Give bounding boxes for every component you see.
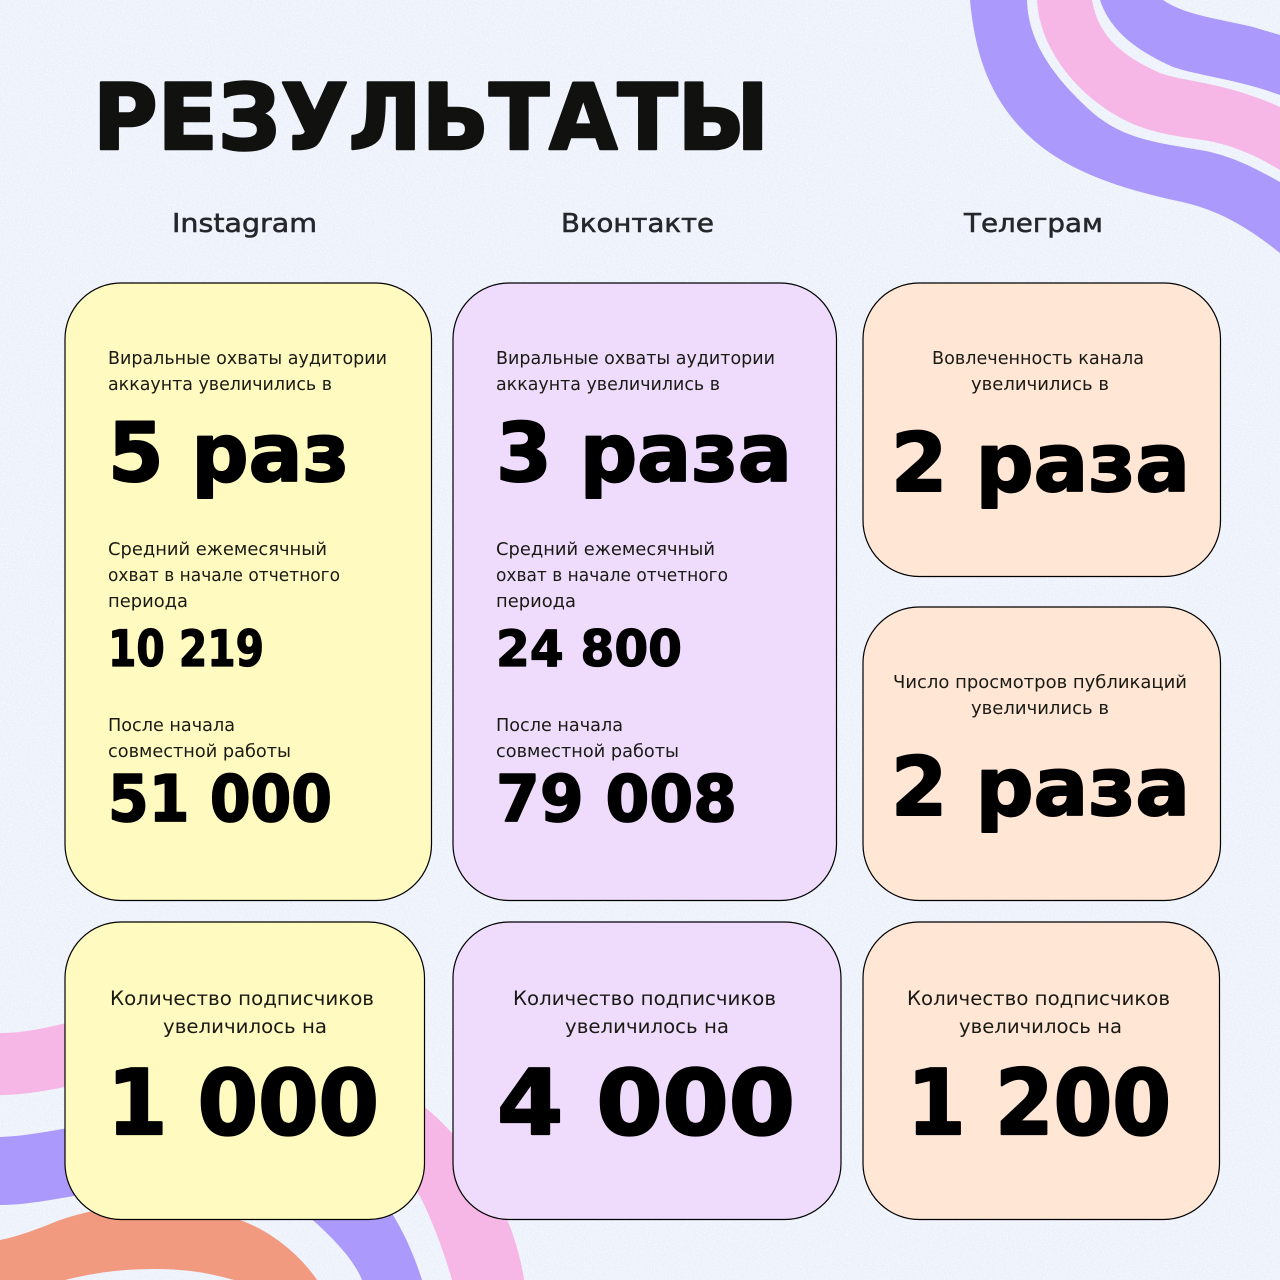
number: 2 раза: 2 раза — [891, 417, 1190, 511]
text: views: Число просмотров публикаций — [893, 673, 1187, 693]
number: 1 000: 1 000 — [107, 1051, 379, 1156]
text: engagement — [932, 349, 1144, 395]
panel: Telegram subscribers — [863, 922, 1220, 1220]
text: viral reach: аккаунта увеличились в — [108, 375, 332, 395]
text: monthly reach at start: охват в начале отчетного — [496, 566, 728, 586]
text: monthly reach at start: периода — [496, 592, 576, 612]
text: subscribers: Количество подписчиков — [513, 987, 776, 1010]
text: subscribers — [110, 987, 374, 1038]
text: monthly reach at start: Средний ежемесячный — [496, 540, 715, 560]
decorative waves: bottom left — [0, 1020, 524, 1280]
text: viral reach — [496, 349, 775, 395]
text: monthly reach at start: охват в начале отчетного — [108, 566, 340, 586]
column heading: Вконтакте: Вконтакте — [561, 209, 714, 239]
text: after start of work: совместной работы — [496, 742, 679, 762]
text: views — [893, 673, 1187, 719]
text: subscribers: увеличилось на — [959, 1015, 1122, 1038]
text: engagement: Вовлеченность канала — [932, 349, 1144, 369]
text: views: увеличились в — [971, 699, 1109, 719]
number: 3 раза: 3 раза — [496, 407, 792, 501]
text: after start of work: После начала — [108, 716, 235, 736]
number: 51 000: 51 000 — [108, 763, 332, 837]
text: viral reach: Виральные охваты аудитории — [108, 349, 387, 369]
text: engagement: увеличились в — [971, 375, 1109, 395]
text: subscribers — [513, 987, 776, 1038]
column heading: Instagram: Instagram — [172, 209, 317, 239]
panel: Telegram views — [863, 607, 1220, 900]
number: 10 219: 10 219 — [108, 620, 264, 678]
text: monthly reach at start: Средний ежемесячный — [108, 540, 327, 560]
text: after start of work: После начала — [496, 716, 623, 736]
panel: Telegram engagement — [863, 283, 1220, 576]
title: РЕЗУЛЬТАТЫ — [93, 66, 769, 171]
text: monthly reach at start — [496, 540, 728, 612]
text: viral reach: Виральные охваты аудитории — [496, 349, 775, 369]
panel: Vkontakte subscribers — [453, 922, 841, 1220]
number: 5 раз: 5 раз — [108, 407, 349, 501]
text: monthly reach at start: периода — [108, 592, 188, 612]
number: 4 000: 4 000 — [497, 1051, 795, 1156]
text: subscribers: Количество подписчиков — [110, 987, 374, 1010]
number: 1 200: 1 200 — [907, 1051, 1171, 1156]
text: after start of work — [108, 716, 291, 762]
decorative waves: top right — [970, 0, 1280, 253]
text: subscribers: увеличилось на — [565, 1015, 729, 1038]
text: after start of work — [496, 716, 679, 762]
text: viral reach — [108, 349, 387, 395]
text: viral reach: аккаунта увеличились в — [496, 375, 720, 395]
number: 2 раза: 2 раза — [891, 741, 1190, 835]
text: after start of work: совместной работы — [108, 742, 291, 762]
number: 24 800: 24 800 — [496, 620, 682, 678]
panel: Instagram subscribers — [65, 922, 424, 1220]
text: monthly reach at start — [108, 540, 340, 612]
number: 79 008: 79 008 — [496, 763, 737, 837]
text: subscribers: увеличилось на — [163, 1015, 327, 1038]
panel: Instagram reach — [65, 283, 432, 900]
panel: Vkontakte reach — [453, 283, 836, 900]
text: subscribers — [907, 987, 1170, 1038]
column heading: Телеграм: Телеграм — [963, 209, 1103, 239]
text: subscribers: Количество подписчиков — [907, 987, 1170, 1010]
